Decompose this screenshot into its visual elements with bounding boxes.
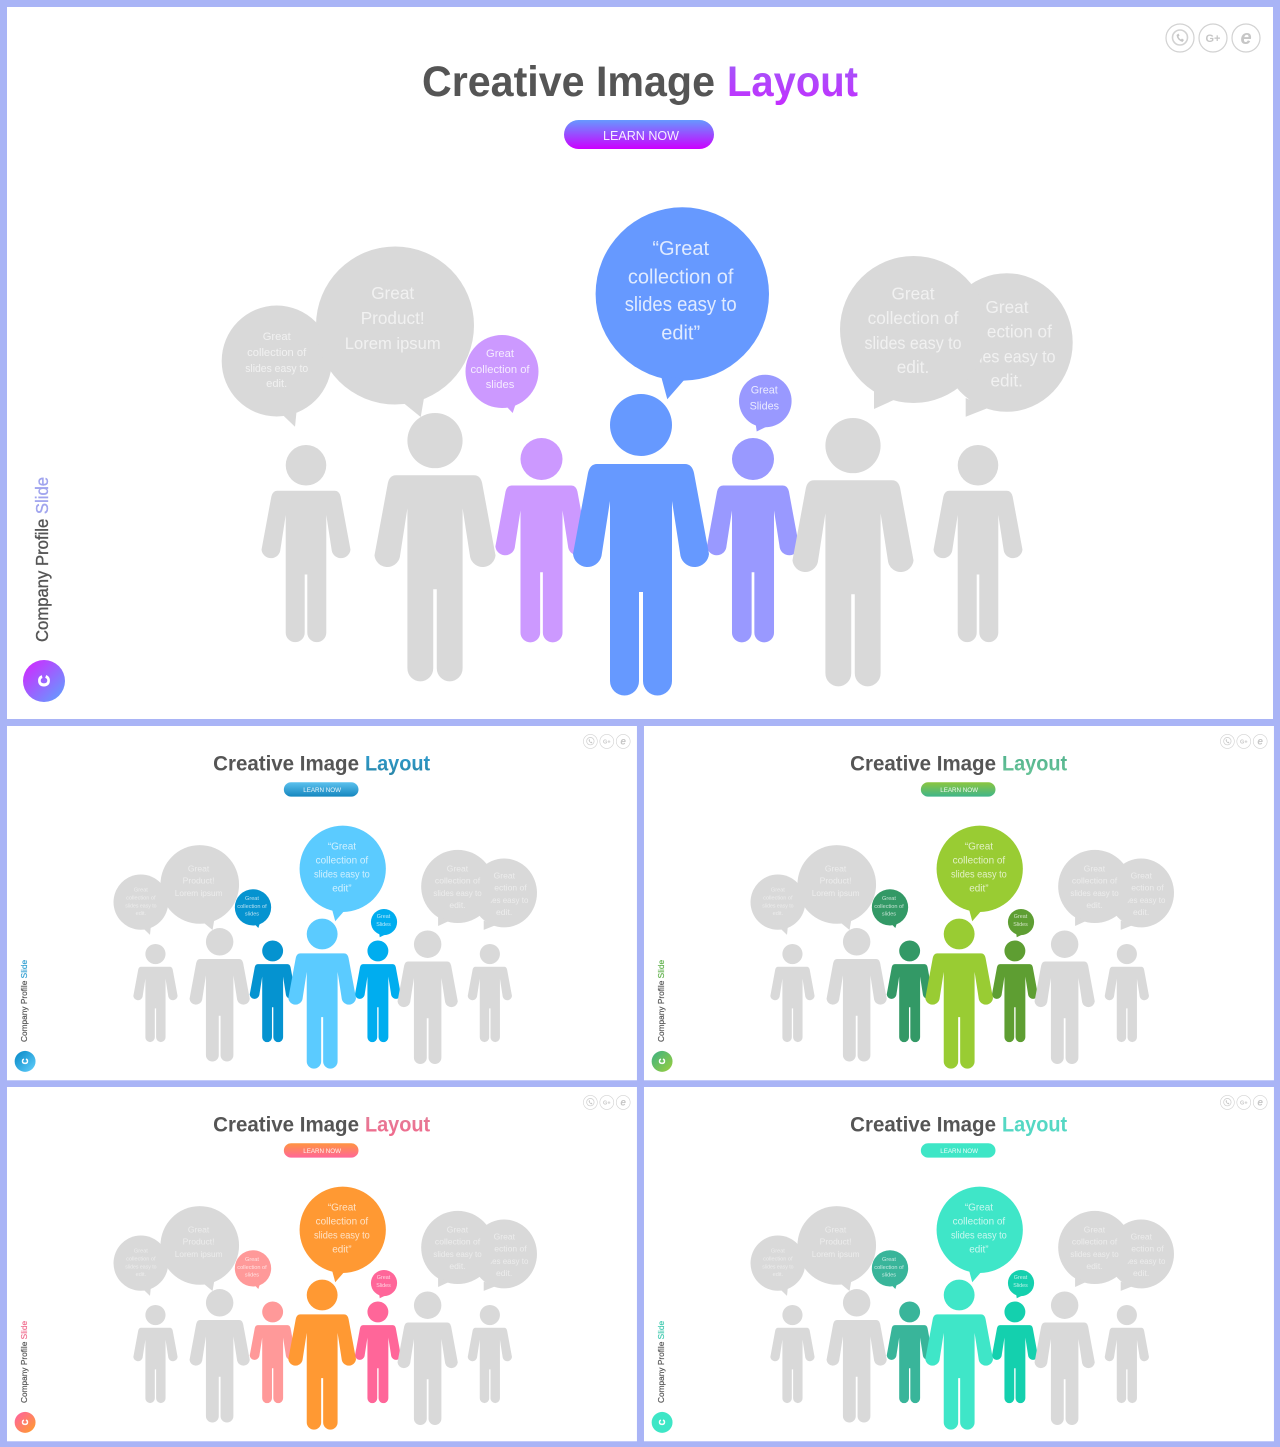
speech bubble: right accent [371,1270,397,1298]
speech bubble: far right: edit. [496,1268,512,1278]
speech bubble: purple: collection of [470,364,530,376]
speech bubble: far right: slides easy to [1117,895,1166,905]
person: right accent [355,940,401,1042]
social icons [583,734,630,748]
speech bubble: center blue: slides easy to [625,294,737,316]
speech bubble: far right: slides easy to [480,895,529,905]
title: Creative Image [850,1113,996,1136]
speech bubble: left large [160,1206,239,1291]
social icons: G+ [1206,33,1220,45]
speech bubble: left accent: collection of [874,904,904,910]
speech bubble: right large: Great [892,283,935,303]
logo badge: C [21,1419,30,1425]
title: Layout [365,752,430,775]
speech bubble: right accent: Great [377,1275,391,1281]
person: gray left [374,413,496,681]
speech bubble: far right: Great [494,870,516,880]
speech bubble: right large: edit. [1086,1261,1103,1271]
speech bubble: right accent: Slides [376,922,391,928]
speech bubble: far right [1108,1219,1174,1291]
speech bubble: center blue: “Great [652,238,709,260]
speech bubble: far left: Great [263,331,292,343]
person: right accent [992,1301,1038,1403]
speech bubble: purple: Great [486,348,515,360]
panel: small slide, blue theme [7,726,637,1080]
person: gray right [398,931,458,1064]
title: Layout [1002,1113,1067,1136]
speech bubble: far right [471,858,537,930]
speech bubble: far left [222,306,332,427]
logo badge [15,1412,36,1433]
person: purple [495,438,588,642]
person: gray far left [133,944,178,1042]
button: learn now: LEARN NOW [303,787,341,794]
speech bubble: far right: edit. [496,907,512,917]
button: learn now [921,782,995,797]
person: center [288,1280,356,1430]
speech bubble: left large: Lorem ipsum [812,889,860,898]
person: center [925,1280,993,1430]
speech bubble: far left [114,1236,168,1296]
title [213,752,430,775]
speech bubble: far right: Great [1131,1231,1153,1241]
speech bubble: center [937,1187,1023,1282]
speech bubble: right accent: Slides [1013,922,1028,928]
social icons [1220,734,1267,748]
social icons: G+ [1240,1100,1248,1106]
speech bubble: far right [1108,858,1174,930]
speech bubble: left accent: collection of [874,1265,904,1271]
sidebar label: Company Profile Slide [19,1321,29,1403]
speech bubble: far left: slides easy to [125,904,157,910]
button: learn now [564,120,714,149]
speech bubble: left large: Great [825,1224,847,1234]
social icons [1166,24,1260,52]
title [850,1113,1067,1136]
speech bubble: far right [941,273,1073,417]
speech bubble: right large: edit. [449,1261,466,1271]
speech bubble: left large: Product! [820,876,852,886]
speech bubble: center [937,826,1023,921]
speech bubble: far left: edit. [773,911,784,917]
social icons: e [1257,736,1263,747]
person: gray far left [770,1305,815,1403]
speech bubble: left large: Lorem ipsum [345,334,441,353]
speech bubble: center [300,1187,386,1282]
speech bubble: far right: collection of [961,322,1052,342]
speech bubble: center: edit” [969,1244,989,1255]
title: Creative Image [213,752,359,775]
title: Creative Image [850,752,996,775]
speech bubble: far left: Great [771,888,785,894]
speech bubble: right large [1058,1211,1131,1287]
speech bubble: right accent: Great [377,914,391,920]
person: left accent [250,940,296,1042]
speech bubble: right large: Great [447,1224,469,1234]
speech bubble: center: edit” [332,1244,352,1255]
logo badge: C [21,1058,30,1064]
speech bubble: far left: Great [771,1249,785,1255]
speech bubble: left accent: collection of [237,904,267,910]
social icons [1220,1095,1267,1109]
logo badge: C [658,1058,667,1064]
speech bubble: right large: slides easy to [1070,1249,1119,1259]
speech bubble: left accent: slides [245,912,259,918]
speech bubble: far left [751,1236,805,1296]
title [213,1113,430,1136]
speech bubble: left large: Product! [183,1237,215,1247]
speech bubble: far right: slides easy to [958,347,1056,367]
sidebar label: Company Profile Slide [656,1321,666,1403]
person: left accent [250,1301,296,1403]
person: gray right [1035,1292,1095,1425]
speech bubble: left large: Product! [361,308,425,328]
speech bubble: center: “Great [328,841,356,852]
speech bubble: right large: collection of [435,1237,481,1247]
speech bubble: right accent: Great [1014,914,1028,920]
speech bubble: far left: edit. [136,911,147,917]
social icons: G+ [603,739,611,745]
speech bubble: left large: Great [825,863,847,873]
speech bubble: left large: Lorem ipsum [812,1250,860,1259]
speech bubble: far left: Great [134,1249,148,1255]
speech bubble: right accent [1008,909,1034,937]
speech bubble: far right: Great [986,297,1029,317]
speech bubble: far right: collection of [1118,1244,1164,1254]
speech bubble: far left: slides easy to [245,363,308,375]
person: left accent [887,940,933,1042]
speech bubble: far left: collection of [763,1257,793,1263]
speech bubble: far left: collection of [126,896,156,902]
speech bubble: right large: Great [447,863,469,873]
panel: small slide, green theme [644,726,1274,1080]
person: gray left [827,928,887,1062]
speech bubble: right accent: Slides [1013,1283,1028,1289]
speech bubble: left large [797,1206,876,1291]
person: center [288,919,356,1069]
speech bubble: left large: Lorem ipsum [175,1250,223,1259]
speech bubble: purple [466,335,538,413]
speech bubble: right large: slides easy to [433,888,482,898]
speech bubble: right large: collection of [435,876,481,886]
speech bubble: left large [316,246,474,417]
social icons: G+ [603,1100,611,1106]
speech bubble: far right: slides easy to [1117,1256,1166,1266]
person: gray right [792,418,914,686]
logo badge [652,1412,673,1433]
speech bubble: left accent [872,889,908,928]
speech bubble: far left: edit. [773,1272,784,1278]
person: center [925,919,993,1069]
logo badge: C [658,1419,667,1425]
speech bubble: right large: collection of [868,308,959,328]
speech bubble: left large: Product! [820,1237,852,1247]
speech bubble: center [300,826,386,921]
title: Creative Image [213,1113,359,1136]
person: gray left [190,928,250,1062]
speech bubble: right accent [1008,1270,1034,1298]
speech bubble: left accent [235,1250,271,1289]
logo badge: C [36,675,54,687]
speech bubble: center blue: collection of [628,266,734,288]
sidebar label: Company Profile Slide [19,960,29,1042]
person: gray far right [1105,1305,1149,1403]
title: Layout [365,1113,430,1136]
speech bubble: lavender [739,375,792,432]
person: center blue [573,394,709,696]
speech bubble: right accent [371,909,397,937]
panel: small slide, orange theme [7,1087,637,1441]
speech bubble: left large: Great [188,863,210,873]
speech bubble: right large: slides easy to [433,1249,482,1259]
speech bubble: right large [421,850,494,926]
speech bubble: far right: collection of [481,883,527,893]
speech bubble: right large: collection of [1072,876,1118,886]
speech bubble: center: “Great [965,841,993,852]
speech bubble: center: collection of [953,855,1005,866]
title: Layout [727,59,858,106]
person: gray far right [468,1305,512,1403]
speech bubble: far right: slides easy to [480,1256,529,1266]
person: gray far right [1105,944,1149,1042]
speech bubble: left accent: Great [245,896,259,902]
person: left accent [887,1301,933,1403]
speech bubble: far left: edit. [266,378,287,390]
person: gray far right [934,445,1022,642]
button: learn now: LEARN NOW [940,787,978,794]
speech bubble: left accent: slides [882,1273,896,1279]
social icons: e [620,1097,626,1108]
speech bubble: left accent: collection of [237,1265,267,1271]
title: Creative Image [422,59,715,106]
panel: small slide, teal theme [644,1087,1274,1441]
speech bubble: purple: slides [486,379,515,391]
speech bubble: far right: Great [494,1231,516,1241]
speech bubble: far right: edit. [1133,907,1149,917]
speech bubble: far right: collection of [1118,883,1164,893]
speech bubble: center: collection of [316,855,368,866]
speech bubble: right large: collection of [1072,1237,1118,1247]
speech bubble: center: collection of [953,1216,1005,1227]
speech bubble: right large: Great [1084,863,1106,873]
speech bubble: left accent: Great [882,1257,896,1263]
speech bubble: center: slides easy to [314,1230,370,1241]
speech bubble: left accent: Great [882,896,896,902]
speech bubble: left accent: Great [245,1257,259,1263]
speech bubble: center: edit” [332,883,352,894]
person: right accent [355,1301,401,1403]
speech bubble: center: edit” [969,883,989,894]
speech bubble: far right: edit. [1133,1268,1149,1278]
speech bubble: right accent: Great [1014,1275,1028,1281]
speech bubble: far left: Great [134,888,148,894]
speech bubble: right large [1058,850,1131,926]
speech bubble: far left [114,875,168,935]
speech bubble: far left: collection of [247,347,307,359]
speech bubble: right large: Great [1084,1224,1106,1234]
person: gray right [398,1292,458,1425]
person: gray right [1035,931,1095,1064]
speech bubble: center blue [596,207,769,399]
logo badge [15,1051,36,1072]
person: gray far left [133,1305,178,1403]
speech bubble: left large [160,845,239,930]
speech bubble: far left: slides easy to [762,904,794,910]
title [422,59,858,106]
speech bubble: right large: edit. [449,900,466,910]
speech bubble: right large: slides easy to [1070,888,1119,898]
speech bubble: right accent: Slides [376,1283,391,1289]
speech bubble: right large: edit. [897,357,929,377]
speech bubble: far left [751,875,805,935]
person: lavender [707,438,799,642]
person: gray left [190,1289,250,1423]
social icons: e [1257,1097,1263,1108]
speech bubble: left accent: slides [245,1273,259,1279]
speech bubble: left accent [235,889,271,928]
speech bubble: lavender: Slides [750,400,780,412]
title [850,752,1067,775]
speech bubble: far left: slides easy to [762,1265,794,1271]
speech bubble: left large: Lorem ipsum [175,889,223,898]
social icons [583,1095,630,1109]
sidebar label: Company Profile Slide [656,960,666,1042]
speech bubble: left accent [872,1250,908,1289]
speech bubble: left accent: slides [882,912,896,918]
button: learn now [921,1143,995,1158]
speech bubble: center blue: edit” [661,322,700,344]
speech bubble: far right: Great [1131,870,1153,880]
speech bubble: far left: collection of [126,1257,156,1263]
speech bubble: left large: Product! [183,876,215,886]
social icons: e [620,736,626,747]
speech bubble: far left: slides easy to [125,1265,157,1271]
speech bubble: left large [797,845,876,930]
button: learn now: LEARN NOW [940,1148,978,1155]
speech bubble: right large: slides easy to [864,333,962,353]
logo badge [23,660,65,702]
speech bubble: center: slides easy to [951,1230,1007,1241]
button: learn now: LEARN NOW [603,129,679,143]
person: gray left [827,1289,887,1423]
speech bubble: right large [840,256,987,409]
speech bubble: center: “Great [965,1202,993,1213]
person: gray far left [262,445,350,642]
sidebar label: Company Profile Slide [32,477,52,642]
button: learn now [284,1143,358,1158]
speech bubble: far right: edit. [990,371,1023,391]
panel: main slide, purple theme [7,7,1273,719]
speech bubble: center: slides easy to [314,869,370,880]
speech bubble: far right [471,1219,537,1291]
speech bubble: left large: Great [188,1224,210,1234]
person: gray far right [468,944,512,1042]
button: learn now: LEARN NOW [303,1148,341,1155]
speech bubble: far left: edit. [136,1272,147,1278]
social icons: e [1240,27,1252,49]
speech bubble: right large: edit. [1086,900,1103,910]
title: Layout [1002,752,1067,775]
speech bubble: center: slides easy to [951,869,1007,880]
person: gray far left [770,944,815,1042]
speech bubble: right large [421,1211,494,1287]
speech bubble: far right: collection of [481,1244,527,1254]
speech bubble: center: collection of [316,1216,368,1227]
speech bubble: lavender: Great [751,384,778,396]
social icons: G+ [1240,739,1248,745]
speech bubble: left large: Great [371,283,414,303]
logo badge [652,1051,673,1072]
speech bubble: center: “Great [328,1202,356,1213]
person: right accent [992,940,1038,1042]
button: learn now [284,782,358,797]
speech bubble: far left: collection of [763,896,793,902]
